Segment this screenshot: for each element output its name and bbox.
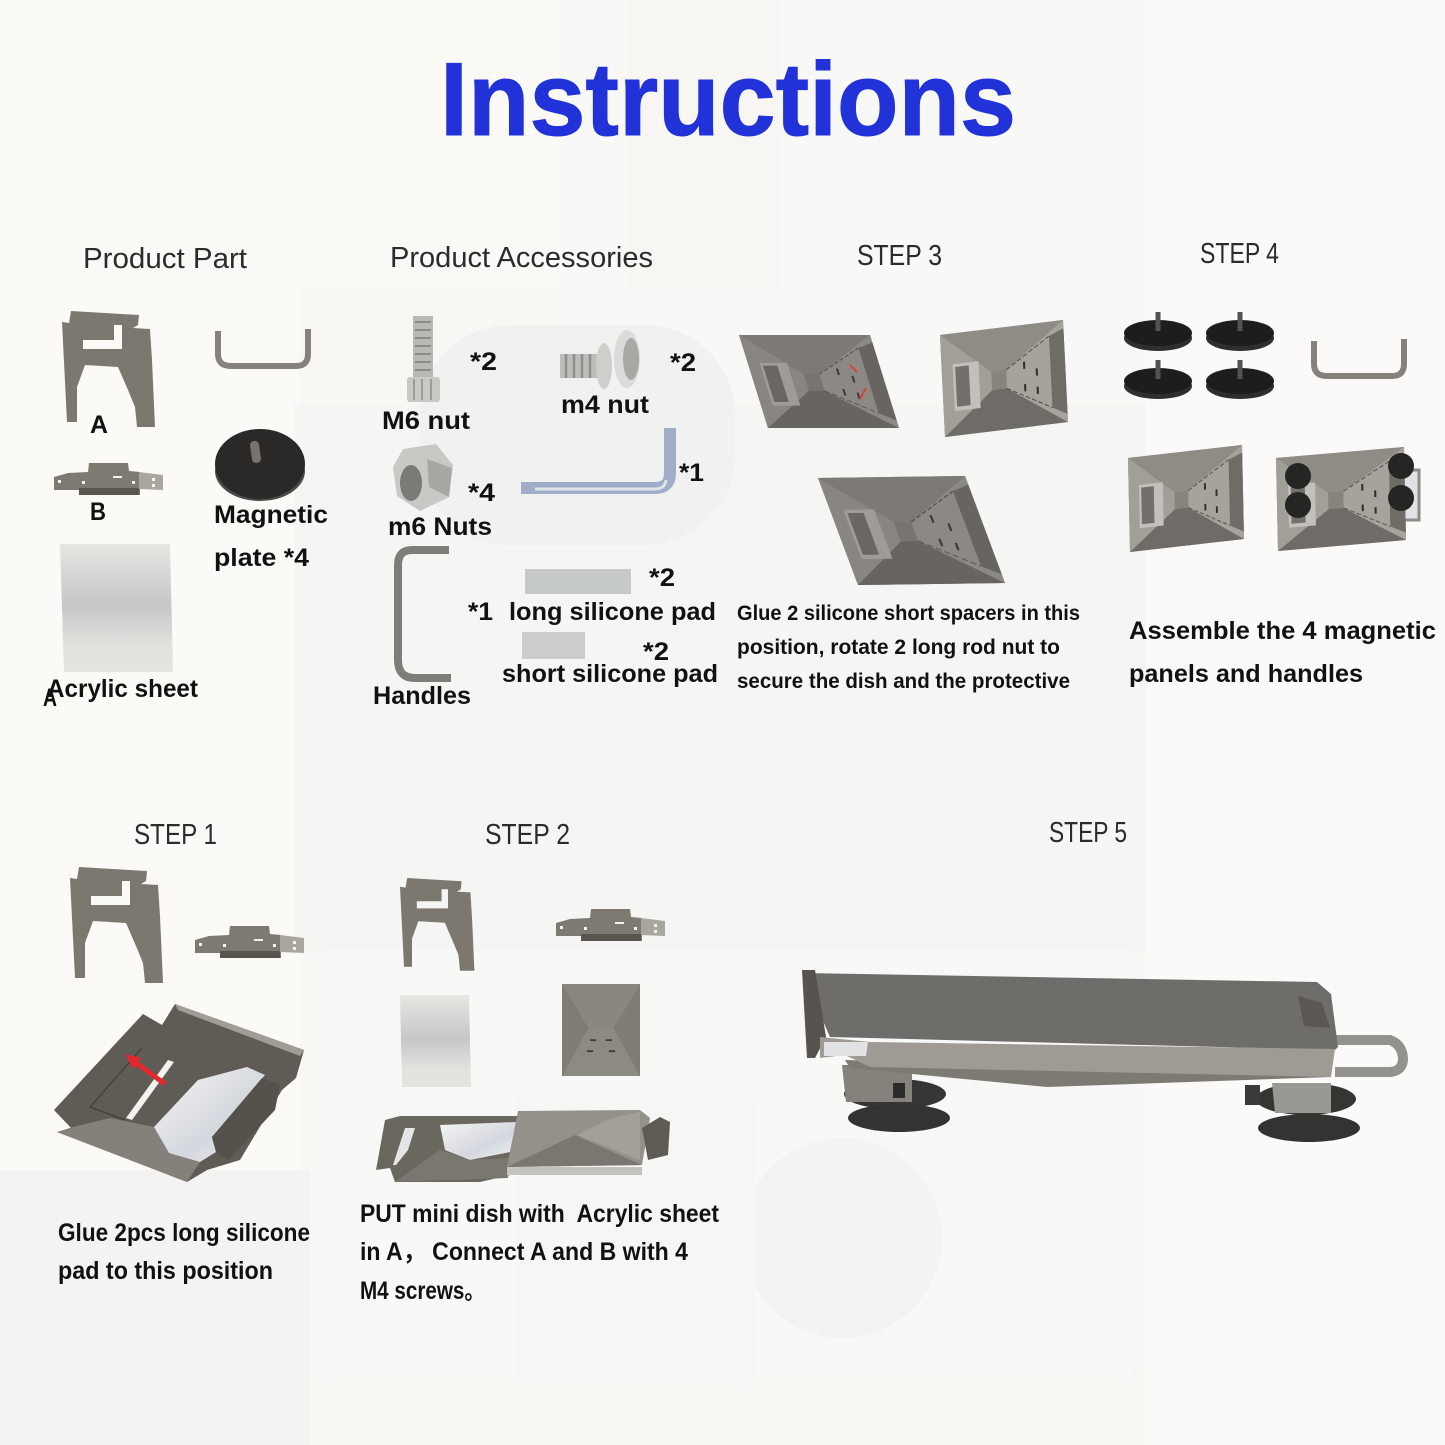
- label m4 nut: m4 nut: [561, 391, 650, 419]
- step 3 text: position, rotate 2 long rod nut to: [737, 636, 1060, 659]
- front magnets: [848, 1104, 1360, 1142]
- assembled stand side view: [802, 970, 1403, 1142]
- acrylic sheet: [400, 995, 471, 1087]
- step 3 text: secure the dish and the protective: [737, 670, 1070, 693]
- step 3 text: Glue 2 silicone short spacers in this: [737, 602, 1080, 625]
- part A: [400, 878, 474, 971]
- part B: [195, 926, 304, 958]
- heading: step 4: STEP 4: [1200, 238, 1279, 270]
- rear magnets: [844, 1079, 1356, 1115]
- m4 screw: [560, 330, 640, 389]
- panel: step 5: [802, 970, 1403, 1142]
- part B: [556, 909, 665, 941]
- label handles: Handles: [373, 682, 471, 710]
- heading: step 2: STEP 2: [485, 819, 570, 851]
- quantity: *1: [679, 459, 704, 487]
- handle: [1314, 339, 1404, 376]
- label magnetic plate: Magnetic: [214, 501, 328, 529]
- long silicone pad: [525, 569, 631, 594]
- step 4 text: Assemble the 4 magnetic: [1129, 617, 1436, 645]
- side band light: [820, 1037, 1335, 1077]
- label M6 nut: M6 nut: [382, 407, 471, 435]
- quantity: *2: [649, 564, 675, 592]
- M6 screw: [407, 316, 440, 402]
- label acrylic sheet: Acrylic sheet: [47, 675, 199, 703]
- assembled dish and panel: [376, 1110, 670, 1182]
- label A: A: [90, 411, 108, 439]
- brackets: [842, 1065, 1331, 1113]
- quantity: *4: [468, 479, 495, 507]
- label B: B: [90, 498, 106, 526]
- handle: [218, 329, 308, 366]
- quantity: *2: [670, 349, 696, 377]
- step 2 text: PUT mini dish with Acrylic sheet: [360, 1200, 720, 1228]
- step 1 text: Glue 2pcs long silicone: [58, 1219, 310, 1247]
- step 1 text: [58, 1219, 310, 1285]
- panel: step 1: [54, 867, 310, 1285]
- handle side view: [398, 550, 451, 678]
- dish enlarged: [818, 476, 1005, 585]
- m6 hex nut: [393, 444, 453, 511]
- label magnetic plate: [214, 501, 328, 572]
- dish angled, glue position: [739, 335, 899, 428]
- quantity: *2: [643, 638, 669, 666]
- label magnetic plate: plate *4: [214, 544, 309, 572]
- step 4 text: [1129, 617, 1436, 688]
- heading: step 3: STEP 3: [857, 240, 942, 272]
- magnetic plate: [215, 429, 305, 501]
- part B: [54, 463, 163, 495]
- step 2 text: [360, 1200, 720, 1305]
- assembled dish: [1276, 447, 1419, 551]
- lower body: [845, 1060, 1331, 1087]
- quantity: *1: [468, 598, 493, 626]
- dish front: [940, 320, 1068, 437]
- dish with hardware: [1128, 445, 1244, 552]
- label short silicone pad: short silicone pad: [502, 660, 718, 688]
- panel: step 4: [1124, 312, 1436, 688]
- step 4 text: panels and handles: [1129, 660, 1363, 688]
- step 2 text: in A， Connect A and B with 4: [360, 1238, 688, 1266]
- tray with pad position: [54, 1004, 304, 1182]
- hex key: [521, 428, 670, 489]
- end window: [824, 1042, 868, 1056]
- label m6 nuts: m6 Nuts: [388, 513, 492, 541]
- part A: [70, 867, 163, 983]
- step 3 text: [737, 602, 1080, 693]
- panel: product accessories: [373, 316, 718, 710]
- panel: step 3: [737, 320, 1080, 693]
- short silicone pad: [522, 632, 585, 659]
- heading: step 5: STEP 5: [1049, 817, 1127, 849]
- acrylic sheet: [60, 544, 173, 672]
- panel: step 2: [360, 878, 720, 1305]
- label acrylic sheet: A: [43, 684, 57, 712]
- label long silicone pad: long silicone pad: [509, 598, 716, 626]
- handle: [1335, 1040, 1403, 1072]
- part A: [62, 311, 155, 427]
- quantity: *2: [470, 348, 497, 376]
- heading: product part: Product Part: [83, 243, 247, 275]
- four magnets: [1124, 312, 1274, 399]
- mini dish: [562, 984, 640, 1076]
- corner panel: [1298, 996, 1330, 1028]
- top panel: [802, 973, 1338, 1050]
- panel: product part: [43, 311, 328, 712]
- left end: [802, 970, 826, 1058]
- step 1 text: pad to this position: [58, 1257, 273, 1285]
- step 2 text: M4 screws。: [360, 1277, 485, 1305]
- heading: product accessories: Product Accessories: [390, 242, 653, 274]
- title: Instructions: [440, 42, 1016, 158]
- heading: step 1: STEP 1: [134, 819, 217, 851]
